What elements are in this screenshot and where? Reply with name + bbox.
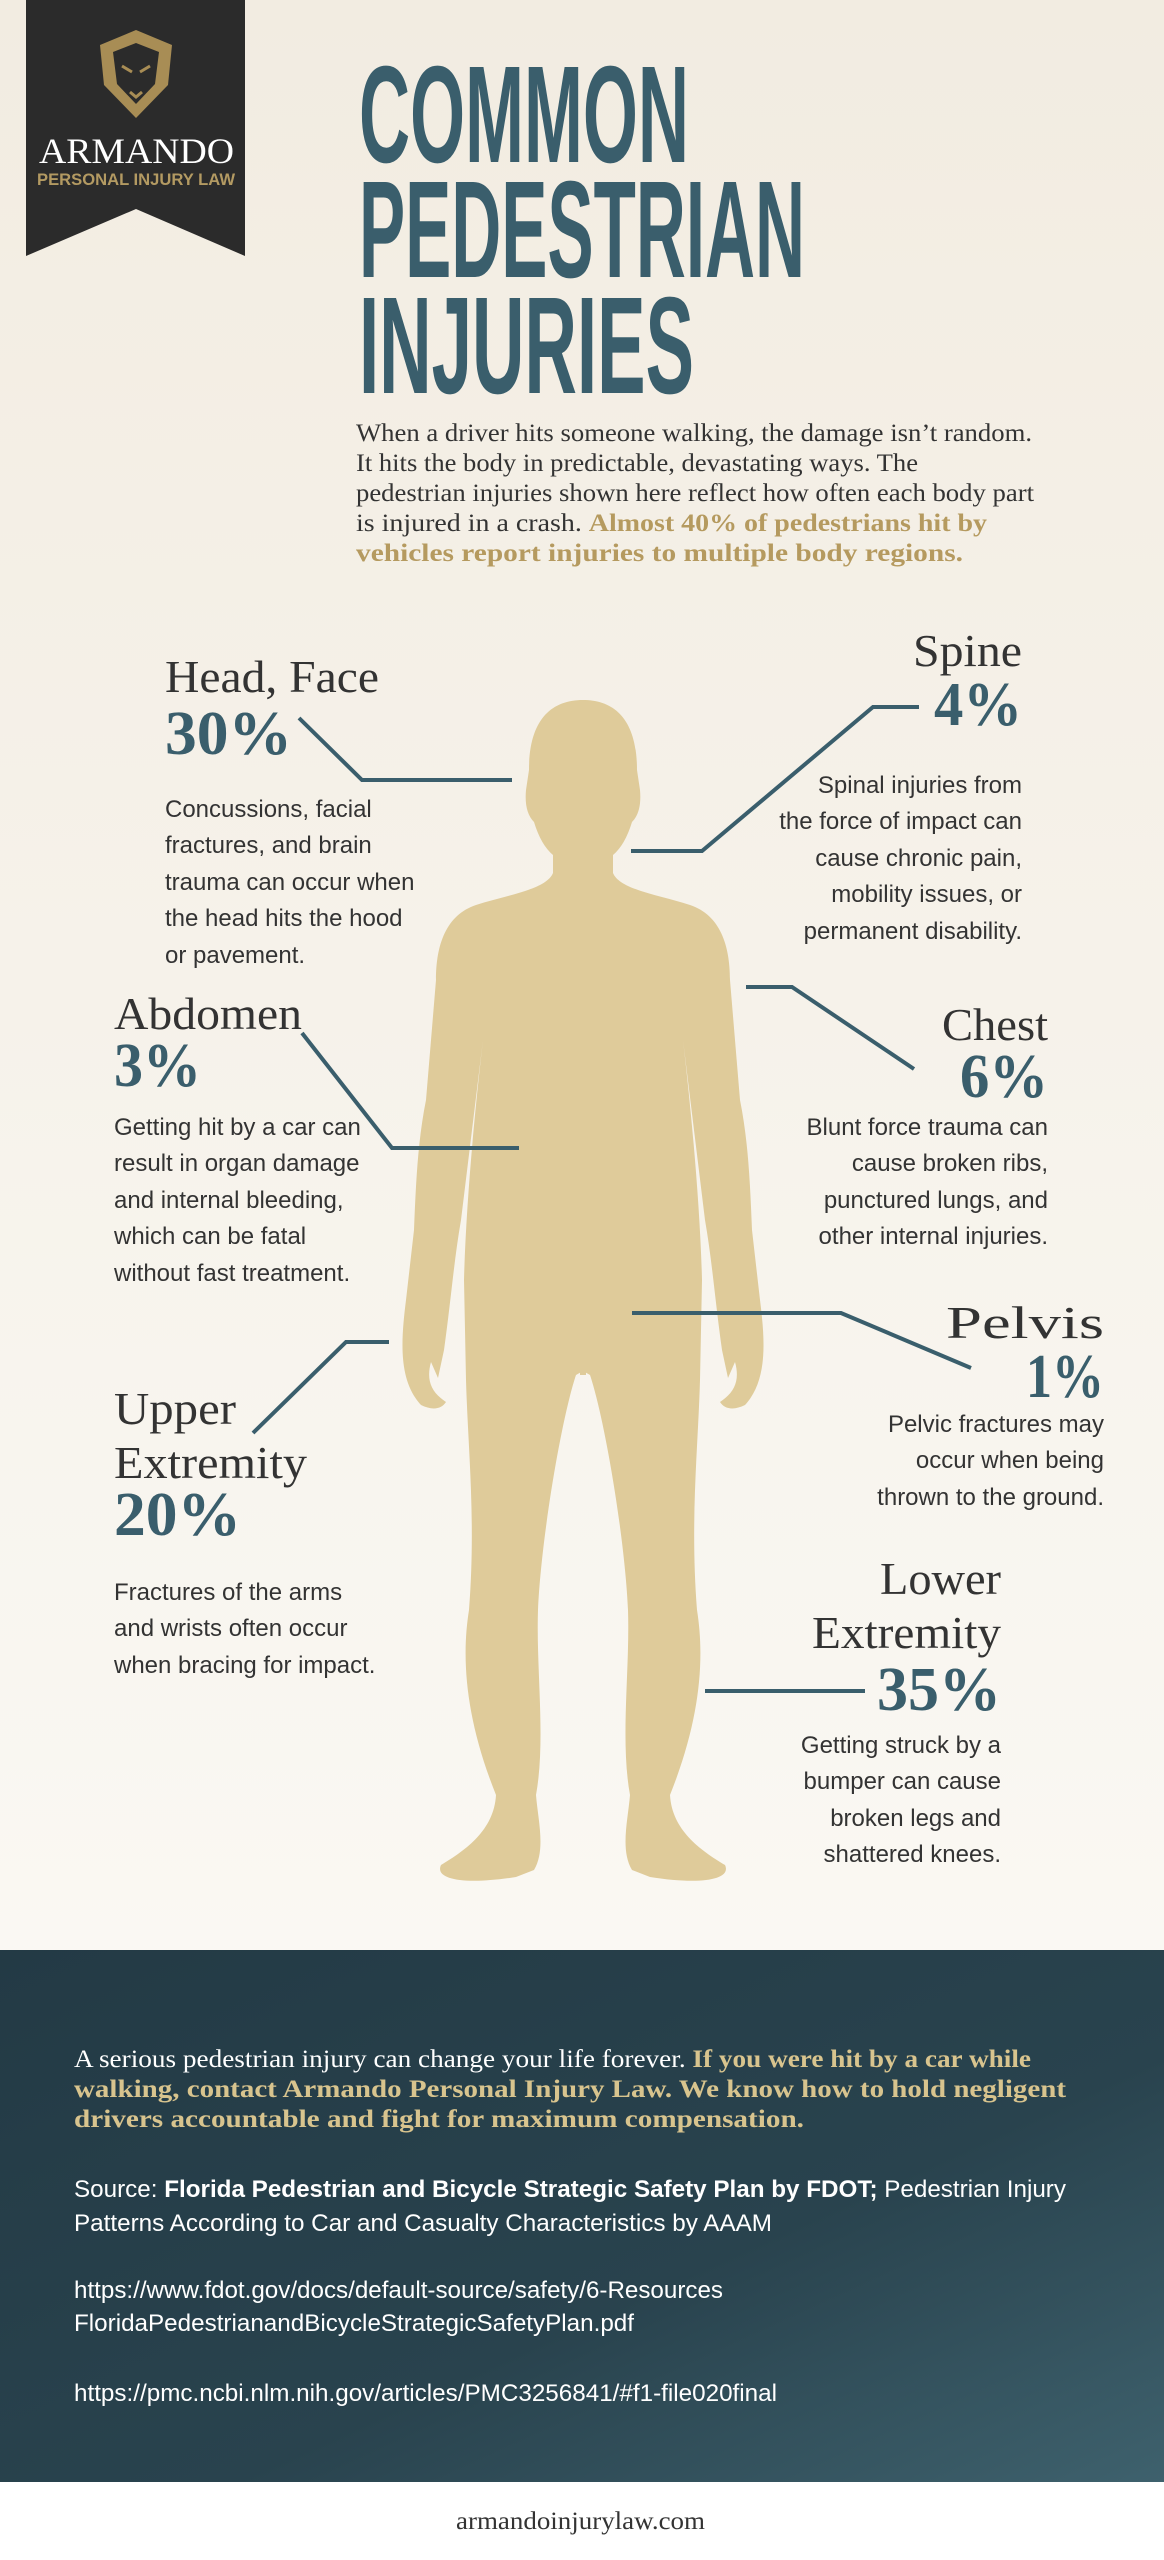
intro paragraph: is injured in a crash. Almost 40% of pedestrians hit by: [356, 510, 988, 537]
arrow: upper extremity leader: [253, 1342, 389, 1433]
panel: chest: 6%: [960, 1043, 1048, 1111]
panel: lower extremity: 35%: [877, 1656, 1001, 1724]
panel: spine: [631, 625, 1022, 945]
arrow: abdomen leader: [302, 1033, 519, 1148]
sources: Source: Florida Pedestrian and Bicycle Strategic Safety Plan by FDOT; Pedestrian Injury: [74, 2176, 1066, 2203]
panel: pelvis: thrown to the ground.: [877, 1484, 1104, 1511]
bottom url strip: [0, 2482, 1164, 2560]
panel: upper extremity: Fractures of the arms: [114, 1579, 342, 1606]
title: [359, 38, 805, 423]
call to action text: walking, contact Armando Personal Injury Law. We know how to hold negligent: [74, 2076, 1067, 2103]
panel: chest: Chest: [942, 999, 1048, 1050]
panel: chest: other internal injuries.: [819, 1223, 1048, 1250]
logo banner: PERSONAL INJURY LAW: [37, 170, 236, 189]
panel: upper extremity: and wrists often occur: [114, 1615, 347, 1642]
intro paragraph: When a driver hits someone walking, the damage isn’t random.: [356, 420, 1032, 447]
title: COMMON: [359, 38, 689, 192]
arrow: chest leader: [746, 987, 914, 1069]
sources: Patterns According to Car and Casualty Characteristics by AAAM: [74, 2210, 772, 2237]
arrow: spine leader: [631, 707, 919, 851]
panel: spine: cause chronic pain,: [815, 845, 1022, 872]
panel: spine: permanent disability.: [804, 918, 1022, 945]
panel: lower extremity: shattered knees.: [824, 1841, 1001, 1868]
panel: spine: Spinal injuries from: [818, 772, 1022, 799]
sources: [74, 2176, 1066, 2407]
panel: pelvis: Pelvic fractures may: [888, 1411, 1104, 1438]
arrow: lower extremity leader: [705, 1689, 865, 1693]
sources: FloridaPedestrianandBicycleStrategicSafetyPlan.pdf: [74, 2310, 634, 2337]
intro paragraph: [356, 420, 1034, 567]
panel: head face: 30%: [165, 700, 292, 768]
panel: lower extremity: [705, 1553, 1002, 1868]
sources: https://www.fdot.gov/docs/default-source/safety/6-Resources: [74, 2277, 723, 2304]
panel: pelvis: occur when being: [916, 1447, 1104, 1474]
logo banner: [26, 0, 245, 256]
panel: head face: fractures, and brain: [165, 832, 372, 859]
panel: head face: the head hits the hood: [165, 905, 403, 932]
call to action text: drivers accountable and fight for maximum compensation.: [74, 2106, 804, 2133]
panel: head face: trauma can occur when: [165, 869, 414, 896]
panel: chest: [746, 987, 1048, 1250]
title: INJURIES: [359, 269, 694, 423]
panel: upper extremity: 20%: [114, 1481, 241, 1549]
panel: upper extremity: when bracing for impact.: [113, 1652, 375, 1679]
panel: abdomen: [113, 988, 519, 1287]
intro paragraph: vehicles report injuries to multiple body regions.: [356, 540, 963, 567]
panel: chest: punctured lungs, and: [824, 1187, 1048, 1214]
panel: lower extremity: broken legs and: [830, 1805, 1001, 1832]
panel: upper extremity: Upper: [114, 1383, 236, 1434]
panel: chest: Blunt force trauma can: [807, 1114, 1048, 1141]
bottom url strip: armandoinjurylaw.com: [456, 2508, 706, 2535]
panel: abdomen: 3%: [114, 1032, 201, 1100]
panel: lower extremity: Lower: [880, 1553, 1001, 1604]
panel: upper extremity: Extremity: [114, 1437, 307, 1488]
panel: spine: the force of impact can: [779, 808, 1022, 835]
panel: abdomen: Getting hit by a car can: [114, 1114, 361, 1141]
panel: abdomen: which can be fatal: [113, 1223, 306, 1250]
panel: chest: cause broken ribs,: [852, 1150, 1048, 1177]
intro paragraph: It hits the body in predictable, devastating ways. The: [356, 450, 918, 477]
panel: head face: or pavement.: [165, 942, 305, 969]
arrow: pelvis leader: [632, 1313, 971, 1368]
intro paragraph: pedestrian injuries shown here reflect how often each body part: [356, 480, 1034, 507]
panel: upper extremity: [113, 1342, 389, 1679]
body silhouette: [402, 700, 764, 1881]
panel: head face: Head, Face: [165, 651, 379, 702]
arrow: head leader: [299, 718, 512, 780]
panel: abdomen: result in organ damage: [114, 1150, 359, 1177]
panel: pelvis: Pelvis: [946, 1297, 1104, 1348]
panel: abdomen: and internal bleeding,: [114, 1187, 344, 1214]
panel: lower extremity: Extremity: [812, 1607, 1001, 1658]
panel: head face: [165, 651, 512, 969]
icon: lion shield: [100, 30, 172, 118]
panel: lower extremity: Getting struck by a: [801, 1732, 1002, 1759]
panel: abdomen: Abdomen: [114, 988, 302, 1039]
call to action text: A serious pedestrian injury can change your life forever. If you were hit by a car while: [74, 2046, 1031, 2073]
panel: pelvis: [632, 1297, 1104, 1511]
footer panel: [0, 1950, 1164, 2482]
panel: lower extremity: bumper can cause: [804, 1768, 1001, 1795]
panel: pelvis: 1%: [1026, 1343, 1104, 1411]
panel: abdomen: without fast treatment.: [113, 1260, 350, 1287]
call to action text: [74, 2046, 1067, 2133]
logo banner: ARMANDO: [39, 131, 234, 171]
panel: spine: 4%: [934, 671, 1022, 739]
panel: spine: mobility issues, or: [831, 881, 1022, 908]
panel: head face: Concussions, facial: [165, 796, 372, 823]
panel: spine: Spine: [913, 625, 1022, 676]
sources: https://pmc.ncbi.nlm.nih.gov/articles/PMC3256841/#f1-file020final: [74, 2380, 777, 2407]
